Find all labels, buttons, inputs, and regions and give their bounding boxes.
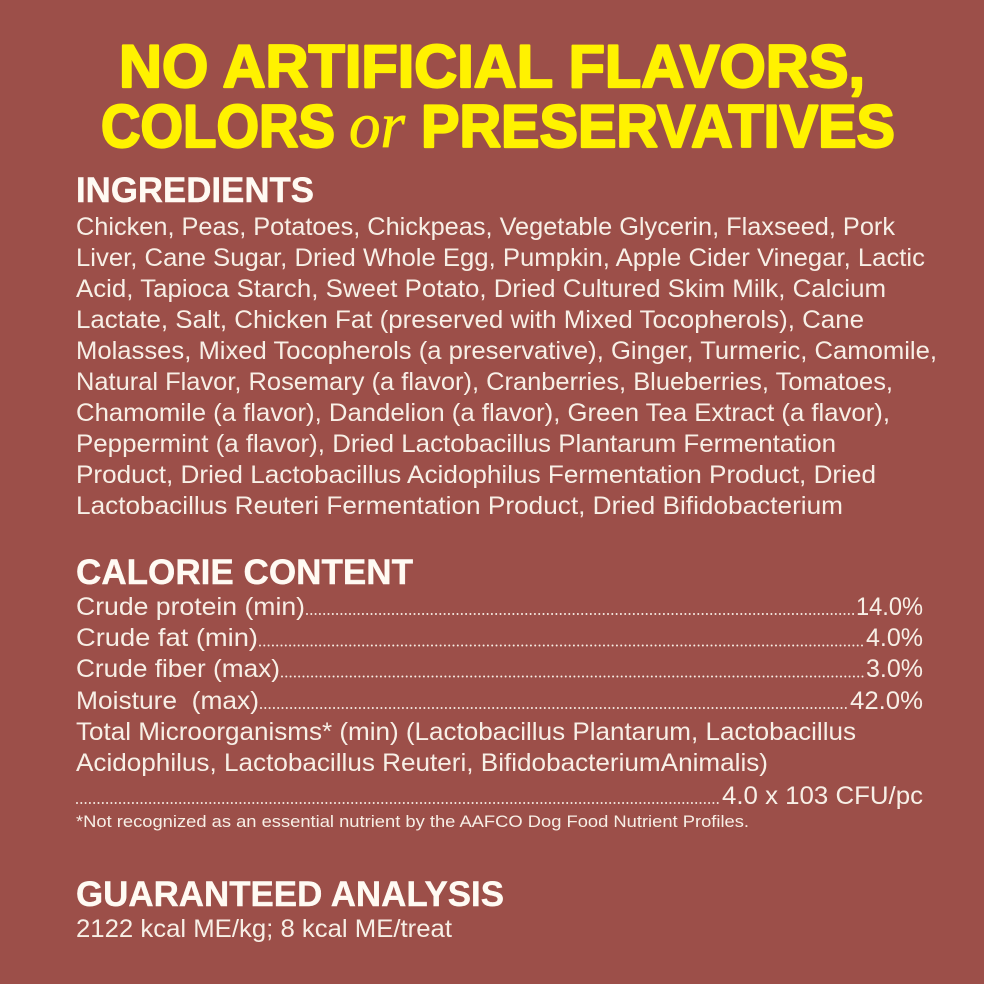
row: moisture [76,687,923,715]
row: total microorganisms: 4.0 x 103 CFU/pc [722,782,923,810]
panel: ingredients [76,171,937,520]
text block: ingredients list: Product, Dried Lactobacillus Acidophilus Fermentation Product, Dried [76,461,876,489]
text block: kcal values: 2122 kcal ME/kg; 8 kcal ME/treat [76,915,452,943]
text block: ingredients list: Molasses, Mixed Tocopherols (a preservative), Ginger, Turmeric, Camomile, [76,337,937,365]
footnote: *Not recognized as an essential nutrient by the AAFCO Dog Food Nutrient Profiles. [76,813,749,831]
row: crude fat: 4.0% [866,624,923,652]
text block: ingredients list: Natural Flavor, Rosemary (a flavor), Cranberries, Blueberries, Tomatoes, [76,368,893,396]
text block: ingredients list: Lactate, Salt, Chicken Fat (preserved with Mixed Tocopherols), Cane [76,306,864,334]
row: crude fat: Crude fat (min) [76,624,258,652]
row: moisture: Moisture (max) [76,687,259,715]
row: crude fiber: 3.0% [866,655,923,683]
text block: ingredients list: Acid, Tapioca Starch, Sweet Potato, Dried Cultured Skim Milk, Calcium [76,275,886,303]
text block: ingredients list: Liver, Cane Sugar, Dried Whole Egg, Pumpkin, Apple Cider Vinegar, Lactic [76,244,925,272]
panel: guaranteed analysis [76,875,504,943]
text block: ingredients list: Chicken, Peas, Potatoes, Chickpeas, Vegetable Glycerin, Flaxseed, Pork [76,213,895,241]
row: moisture: 42.0% [850,687,923,715]
row: crude protein: Crude protein (min) [76,593,305,621]
text block: ingredients list: Peppermint (a flavor), Dried Lactobacillus Plantarum Fermentation [76,430,836,458]
text block: ingredients list: Chamomile (a flavor), Dandelion (a flavor), Green Tea Extract (a flavor), [76,399,890,427]
text block: ingredients list [76,213,937,520]
row: crude protein [76,593,923,621]
heading: calorie content: CALORIE CONTENT [76,553,413,592]
title: NO ARTIFICIAL FLAVORS, [119,33,865,100]
row: total microorganisms: Total Microorganisms* (min) (Lactobacillus Plantarum, Lactobacillus [76,718,856,746]
heading: ingredients: INGREDIENTS [76,171,314,210]
row: crude fat [76,624,923,652]
title [101,33,895,162]
title: COLORS [101,93,335,160]
row: crude protein: 14.0% [856,593,923,621]
title: or [349,89,405,162]
row: crude fiber [76,655,923,683]
title: PRESERVATIVES [421,93,895,160]
row: total microorganisms: Acidophilus, Lactobacillus Reuteri, BifidobacteriumAnimalis) [76,749,768,777]
heading: guaranteed analysis: GUARANTEED ANALYSIS [76,875,504,914]
row: crude fiber: Crude fiber (max) [76,655,280,683]
panel: calorie content [76,553,923,831]
text block: ingredients list: Lactobacillus Reuteri Fermentation Product, Dried Bifidobacterium [76,492,843,520]
row: total microorganisms [76,718,923,810]
